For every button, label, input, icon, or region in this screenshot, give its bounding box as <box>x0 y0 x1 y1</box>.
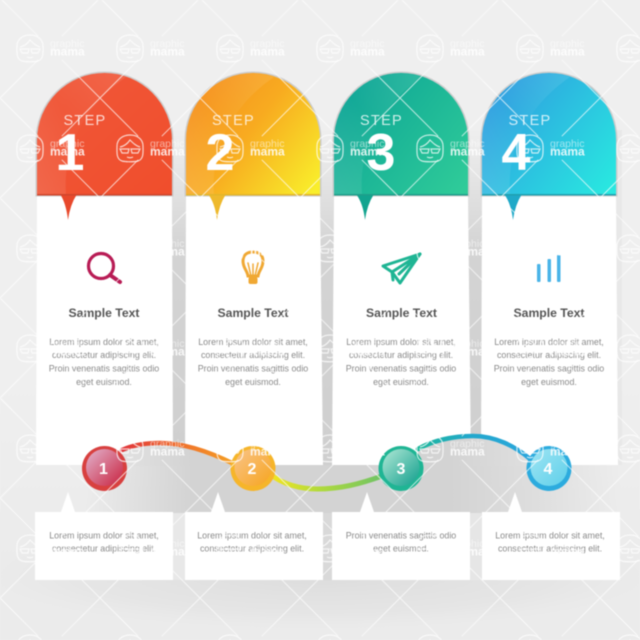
watermark pattern: mama <box>550 344 585 358</box>
body text 2: consectetur adipiscing elit. <box>201 350 305 360</box>
watermark pattern: mama <box>450 144 485 158</box>
heading 3: Sample Text <box>366 306 437 320</box>
panel: step 4 <box>481 73 618 465</box>
watermark pattern: graphic <box>250 138 284 150</box>
timeline node 1 <box>82 446 127 491</box>
watermark pattern: mama <box>250 144 285 158</box>
watermark pattern: graphic <box>150 338 184 350</box>
watermark pattern: graphic <box>150 538 184 550</box>
watermark pattern: graphic <box>250 38 284 50</box>
header arch 4 <box>482 73 616 220</box>
watermark pattern: mama <box>550 244 585 258</box>
step number 3: 3 <box>367 124 395 182</box>
card body 2 <box>185 195 323 465</box>
heading 2: Sample Text <box>218 306 288 320</box>
watermark pattern: graphic <box>250 438 284 450</box>
watermark pattern: mama <box>50 244 85 258</box>
watermark pattern: mama <box>250 244 285 258</box>
panel: step 3 <box>332 73 471 465</box>
watermark pattern: graphic <box>50 238 84 250</box>
watermark pattern: mama <box>250 544 285 558</box>
watermark pattern: graphic <box>250 238 284 250</box>
panel: lower box 3 <box>332 492 470 580</box>
body text 3: Proin venenatis sagittis odio <box>346 364 456 374</box>
watermark pattern: graphic <box>150 438 184 450</box>
timeline node 3 <box>378 446 424 491</box>
watermark pattern: graphic <box>50 38 84 50</box>
watermark pattern: graphic <box>50 538 84 550</box>
watermark pattern: mama <box>550 144 585 158</box>
body text 1: Lorem ipsum dolor sit amet, <box>49 337 159 347</box>
watermark pattern: mama <box>550 544 585 558</box>
body text 2: eget euismod. <box>225 377 281 387</box>
panel: step 2 <box>185 73 323 465</box>
column shadows <box>0 130 640 640</box>
watermark pattern: mama <box>450 544 485 558</box>
heading 4: Sample Text <box>514 306 584 320</box>
watermark pattern: graphic <box>450 38 484 50</box>
watermark pattern: graphic <box>450 438 484 450</box>
watermark pattern: graphic <box>350 338 384 350</box>
timeline node 2: 2 <box>248 461 257 478</box>
panel: lower box 4 <box>482 492 620 580</box>
watermark pattern: mama <box>50 444 85 458</box>
watermark pattern: mama <box>450 344 485 358</box>
lower text 2: consectetur adipiscing elit. <box>200 544 304 554</box>
icon: light bulb <box>243 252 263 284</box>
watermark pattern: graphic <box>450 338 484 350</box>
watermark pattern: mama <box>450 44 485 58</box>
icon: paper plane <box>383 254 420 283</box>
watermark pattern: mama <box>550 444 585 458</box>
watermark pattern: mama <box>250 44 285 58</box>
watermark pattern: graphic <box>550 338 584 350</box>
watermark pattern: mama <box>350 44 385 58</box>
timeline node 2 <box>230 446 276 491</box>
watermark pattern: graphic <box>50 438 84 450</box>
header arch 3 <box>334 73 468 220</box>
watermark pattern: graphic <box>350 138 384 150</box>
step number 4: 4 <box>502 124 531 182</box>
watermark pattern: mama <box>450 244 485 258</box>
watermark pattern: graphic <box>250 338 284 350</box>
watermark pattern: mama <box>350 344 385 358</box>
watermark pattern: graphic <box>50 138 84 150</box>
body text 3: eget euismod. <box>373 377 429 387</box>
watermark pattern: mama <box>50 144 85 158</box>
body text 4: Lorem ipsum dolor sit amet, <box>494 337 604 347</box>
watermark pattern: graphic <box>250 538 284 550</box>
timeline node 3: 3 <box>397 461 406 478</box>
watermark pattern: mama <box>150 544 185 558</box>
panel: step 1 <box>36 73 173 465</box>
watermark pattern: graphic <box>350 238 384 250</box>
watermark pattern: graphic <box>450 538 484 550</box>
heading 1: Sample Text <box>69 306 139 320</box>
lower text 3: eget euismod. <box>373 544 429 554</box>
body text 2: Lorem ipsum dolor sit amet, <box>198 337 308 347</box>
body text 1: consectetur adipiscing elit. <box>52 350 156 360</box>
watermark pattern: graphic <box>350 38 384 50</box>
watermark pattern: mama <box>350 444 385 458</box>
watermark pattern: graphic <box>150 238 184 250</box>
watermark pattern: mama <box>350 144 385 158</box>
watermark pattern: graphic <box>50 338 84 350</box>
icon: bar chart <box>537 255 560 282</box>
body text 2: Proin venenatis sagittis odio <box>198 364 308 374</box>
step label 1: STEP <box>63 113 107 129</box>
watermark pattern: mama <box>150 344 185 358</box>
lower text 2: Lorem ipsum dolor sit amet, <box>197 530 307 540</box>
card body 1 <box>36 195 173 465</box>
body text 1: Proin venenatis sagittis odio <box>49 364 159 374</box>
watermark pattern: graphic <box>550 438 584 450</box>
header arch 2 <box>186 73 320 220</box>
watermark pattern: graphic <box>450 138 484 150</box>
body text 3: consectetur adipiscing elit. <box>349 350 453 360</box>
timeline node 1: 1 <box>99 461 108 478</box>
watermark pattern: graphic <box>450 238 484 250</box>
header arch 1 <box>37 73 172 220</box>
lower text 1: consectetur adipiscing elit. <box>52 544 156 554</box>
watermark pattern: mama <box>250 444 285 458</box>
watermark pattern: graphic <box>550 538 584 550</box>
watermark pattern: mama <box>50 544 85 558</box>
card body 4 <box>481 195 618 465</box>
lower text 4: Lorem ipsum dolor sit amet, <box>495 530 605 540</box>
watermark pattern: mama <box>50 344 85 358</box>
watermark pattern: graphic <box>350 538 384 550</box>
watermark pattern: mama <box>150 44 185 58</box>
watermark pattern: mama <box>450 444 485 458</box>
step number 1: 1 <box>56 124 84 182</box>
body text 4: consectetur adipiscing elit. <box>497 350 601 360</box>
watermark pattern: mama <box>350 244 385 258</box>
watermark pattern: graphic <box>350 438 384 450</box>
timeline connector <box>122 436 530 489</box>
step label 3: STEP <box>360 113 403 129</box>
grey areas under the connector arcs <box>122 436 530 466</box>
watermark pattern: graphic <box>550 238 584 250</box>
watermark pattern: mama <box>50 44 85 58</box>
watermark pattern: graphic <box>550 138 584 150</box>
step number 2: 2 <box>206 124 234 182</box>
panel: lower box 1 <box>35 492 173 580</box>
body text 1: eget euismod. <box>76 377 132 387</box>
watermark pattern: mama <box>150 244 185 258</box>
watermark pattern: mama <box>350 544 385 558</box>
panel: lower box 2 <box>185 492 323 580</box>
lower text 1: Lorem ipsum dolor sit amet, <box>49 530 159 540</box>
card body 3 <box>332 195 471 465</box>
step label 4: STEP <box>508 113 552 129</box>
lower text 3: Proin venenatis sagittis odio <box>346 530 456 540</box>
watermark pattern: mama <box>150 144 185 158</box>
lower text 4: consectetur adipiscing elit. <box>498 544 602 554</box>
body text 4: eget euismod. <box>521 377 577 387</box>
icon: magnifier <box>88 254 120 282</box>
watermark pattern: mama <box>250 344 285 358</box>
watermark pattern: graphic <box>550 38 584 50</box>
watermark pattern: graphic <box>150 38 184 50</box>
watermark pattern: mama <box>550 44 585 58</box>
step label 2: STEP <box>212 113 255 129</box>
timeline node 4: 4 <box>544 461 553 478</box>
body text 4: Proin venenatis sagittis odio <box>494 364 604 374</box>
timeline node 4 <box>526 446 572 491</box>
watermark pattern: mama <box>150 444 185 458</box>
body text 3: Lorem ipsum dolor sit amet, <box>346 337 456 347</box>
watermark pattern: graphic <box>150 138 184 150</box>
